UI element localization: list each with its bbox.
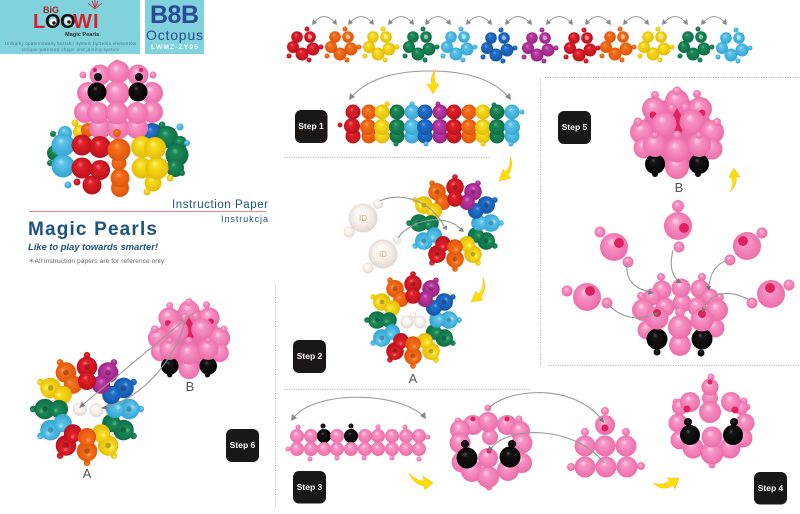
title: Magic Pearls: Magic Pearls: [28, 219, 157, 240]
step 6 dome B: [148, 298, 230, 379]
brand banner: Big Loowi Magic Pearls: Magic Pearls: [65, 32, 99, 38]
step 5 label: Step 5: [562, 122, 588, 132]
title: Magic Pearls: [28, 219, 165, 265]
instruction paper heading: Instruction Paper: [172, 199, 268, 211]
brand banner: Big Loowi Magic Pearls: BiG: [43, 5, 59, 15]
step 5 loose pink pearls: [562, 200, 794, 311]
step 2 connector arcs: [380, 197, 464, 238]
row of colored bead units: [286, 26, 752, 64]
step 4 triangle beads: [567, 407, 645, 478]
yellow arrow: triangle to finished barrel: [653, 478, 679, 489]
step 2 open flower ring: [406, 174, 504, 272]
title: Magic Pearls: ＊All instruction papers are for reference only: [28, 258, 165, 265]
white connector pearls: ID: [359, 214, 367, 223]
step 2 closed flower A: [364, 271, 462, 369]
yellow arrow: step 2 down: [471, 278, 485, 302]
step 3 label: [293, 471, 326, 504]
step 1 colored bead band: [338, 102, 524, 146]
step 6 label: Step 6: [230, 440, 256, 450]
label B top: B: [675, 180, 683, 195]
logo text: L: [33, 11, 45, 33]
model code banner: B8B Octopus: LWMZ-ZY95: [151, 44, 198, 51]
step 4 finished barrel: [668, 374, 754, 468]
model code banner: B8B Octopus: Octopus: [146, 27, 203, 43]
model code banner: B8B Octopus: [145, 0, 204, 54]
step 6 label: [226, 429, 259, 462]
step 1 label: [295, 110, 328, 143]
step 6 connector arcs: [79, 313, 193, 410]
brand banner: Big Loowi Magic Pearls: Unikalny opatentowany kształt i system łączenia elementów: [5, 41, 137, 46]
label B step 6: B: [186, 379, 194, 394]
label A: A: [409, 371, 418, 386]
step 6 flower A: [30, 352, 144, 466]
dotted panel dividers: [276, 78, 800, 508]
logo text: W: [73, 11, 92, 33]
yellow arrow: down to step 1: [427, 69, 439, 94]
logo text: O: [60, 11, 76, 33]
double arrows between units: [312, 16, 727, 25]
yellow arrow: step 3 to barrel: [409, 473, 433, 490]
model code banner: B8B Octopus: B8B: [150, 1, 199, 29]
step 3 pink barrel: [450, 404, 532, 490]
step 4 label: [754, 472, 787, 504]
step 5 connector arcs: [608, 250, 750, 318]
step 2 label: [293, 340, 326, 373]
step 5 label: [558, 111, 591, 144]
yellow arrow: step 1 to step 2: [499, 156, 512, 181]
logo text: I: [93, 11, 99, 33]
step 1 label: Step 1: [298, 121, 324, 131]
yellow arrow: up to dome: [729, 168, 740, 192]
step 4 connector arcs: [488, 393, 604, 463]
step 2 label: Step 2: [297, 351, 323, 361]
step 4 label: Step 4: [758, 483, 784, 493]
instruction paper heading: [29, 199, 268, 224]
white connector pearls: ID: [379, 250, 387, 259]
title: Magic Pearls: Like to play towards smarter!: [28, 242, 158, 253]
step 1 arc arrow: [349, 71, 511, 100]
white connector pearls: [344, 199, 401, 274]
brand banner: Big Loowi Magic Pearls: Unique patented shape and joining system: [22, 47, 119, 52]
brand banner: Big Loowi Magic Pearls: [0, 0, 140, 54]
instruction paper heading: Instrukcja: [221, 214, 268, 224]
step 5 finished dome B: [630, 86, 724, 179]
label A step 6: A: [83, 466, 92, 481]
logo text: O: [45, 11, 61, 33]
step 3 pink strip: [286, 424, 430, 462]
step 5 pink bowl base: [632, 273, 728, 356]
step 3 label: Step 3: [297, 482, 323, 492]
finished octopus figure: [47, 60, 190, 197]
step 3 arc arrow: [291, 397, 426, 421]
